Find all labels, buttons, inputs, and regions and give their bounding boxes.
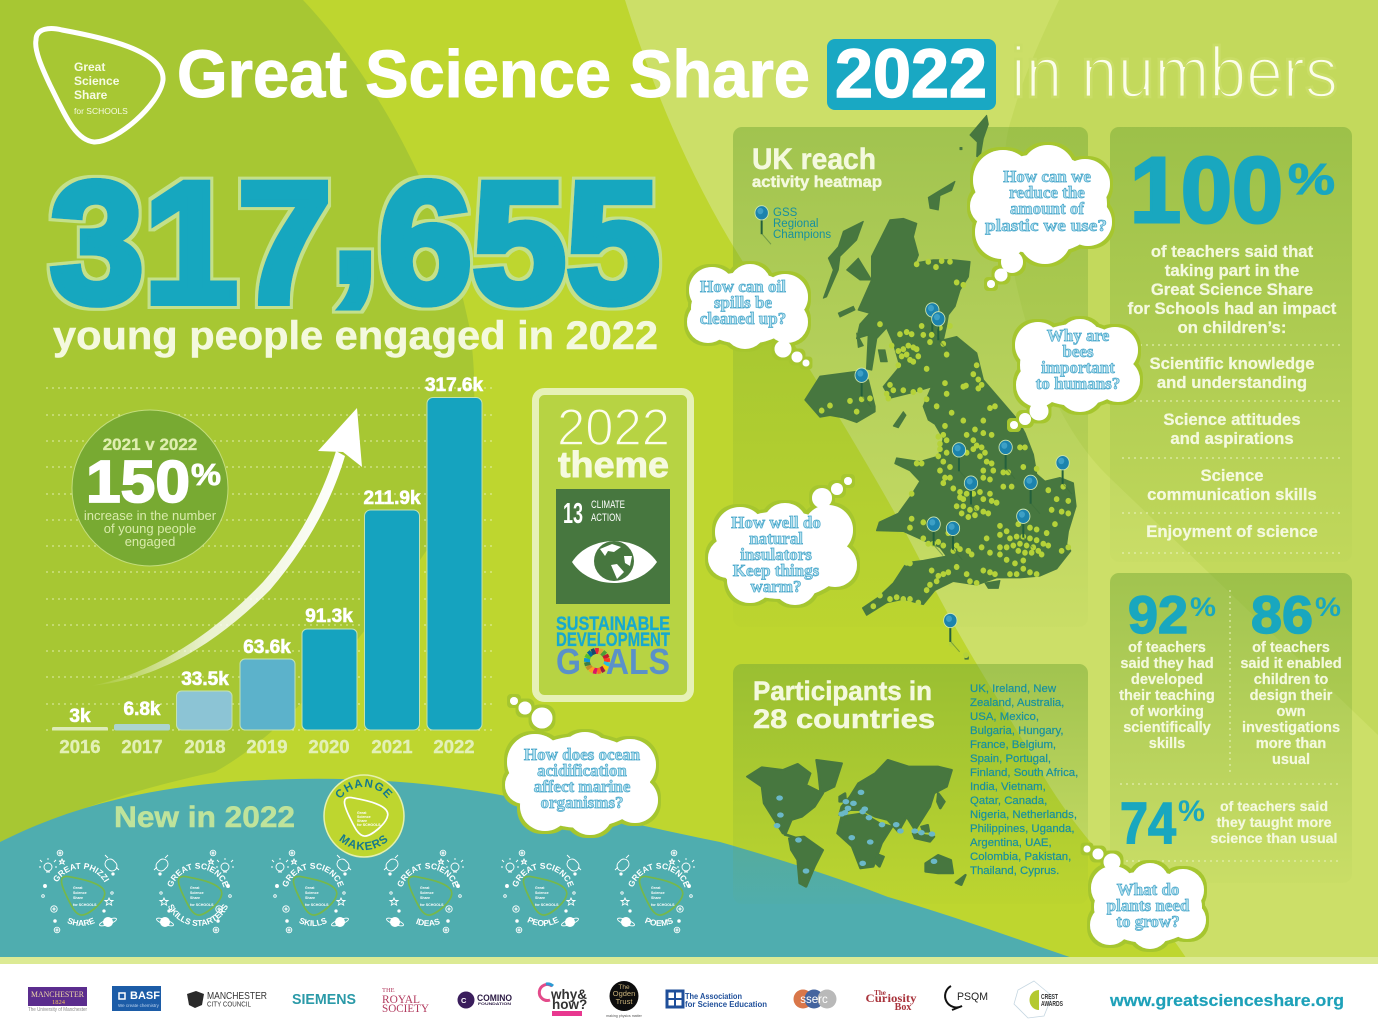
stat: 86%: said it enabled [1240,656,1342,672]
bar 2019 [240,637,295,757]
badge: Great Science Ideas [384,850,464,934]
heading: UK reach: activity heatmap [752,174,882,191]
panel: UK reach [733,115,1088,659]
text: countries list [970,683,1078,877]
stat: 86%: 86 [1251,586,1313,645]
title [177,34,1338,113]
logo: The Curiosity Box: The [874,989,886,997]
text: impact statement: Great Science Share [1151,280,1313,299]
text: website URL: www.greatscienceshare.org [1109,991,1344,1010]
callout: plastic question: How can we [1003,167,1091,186]
callout: insulators question [708,477,857,605]
stat: 92%: skills [1149,736,1185,752]
logo: Comino Foundation [458,992,512,1008]
bar chart: young people engaged per year [46,375,492,757]
teal wave [0,779,1090,964]
text: countries list: Argentina, UAE, [970,837,1052,849]
text: Sustainable Development Goals [556,613,670,682]
badge: Great Science Skills: GREAT SCIENCE [282,862,344,888]
callout: 150% increase: of young people [104,521,196,536]
callout: ocean acidification question: How does ocean [524,745,641,764]
Great Britain [857,219,1076,615]
stat: 92%: 92 [1128,586,1188,645]
badge: Great Science Skills Starters: Share [190,896,200,900]
stat: 74%: % [1178,795,1205,828]
icon: SDG colour wheel [584,648,610,674]
text: countries list: Finland, South Africa, [970,767,1078,779]
logo: Siemens: SIEMENS [292,992,356,1008]
bar 2017: 2017 [121,736,163,757]
heading: New in 2022: New in 2022 [114,801,295,834]
badge: Great Science Ideas: Share [420,896,430,900]
bar 2021: 2021 [371,736,413,757]
logo: Why and How: why& [550,987,587,1002]
stat: 92%: of teachers [1128,640,1206,656]
bar 2021: 211.9k [363,488,421,509]
logo: Royal Society: SOCIETY [382,1001,429,1015]
legend: GSS Regional Champions [755,206,831,244]
heading: UK reach [752,143,882,191]
badge: Change Makers: Great [357,811,367,815]
callout: ocean acidification question [505,697,658,835]
bar 2018 [176,669,232,757]
badge: Great Science Skills: for SCHOOLS [305,903,329,907]
callout: plastic question: amount of [1010,199,1084,218]
badge: Great Science Poems: Science [651,891,665,895]
logo: BASF: BASF [130,990,160,1002]
map: UK activity heatmap [805,115,1076,659]
text: impact statement: for Schools had an impact [1128,299,1337,318]
logo: PSQM: PSQM [957,991,988,1003]
logo: Why and How [539,984,587,1016]
logo: Manchester City Council: MANCHESTER [207,990,267,1002]
badge: Great Phizzi Share [39,850,120,934]
stat: 86%: of teachers [1252,640,1330,656]
logo: Why and How: how? [552,997,587,1012]
badge: Great Science Poems [614,850,695,934]
headline number: , [332,125,378,317]
bar 2016: 3k [69,706,91,727]
bar 2019: 63.6k [243,637,291,658]
badge: Great Science Ideas: GREAT SCIENCE [398,862,459,888]
stat: 74%: science than usual [1211,831,1337,847]
badge: Great Phizzi Share: GREAT PHIZZI [54,862,110,882]
callout: 150% increase: 150 [86,449,190,515]
text: countries list: Philippines, Uganda, [970,823,1074,835]
panel: 2022 theme [536,392,690,698]
title: Great Science Share [177,37,810,112]
callout: insulators question: How well do [731,513,821,532]
text: countries list: USA, Mexico, [970,711,1039,723]
bar 2017: 6.8k [124,699,161,720]
stat: 86%: more than [1256,736,1326,752]
logo: SSERC [794,990,836,1008]
stat: 92% [1119,586,1216,752]
stat: 74%: they taught more [1216,815,1332,831]
logo: Association for Science Education [667,991,767,1009]
badge: Great Science People [501,850,582,934]
badge: Great Science Skills Starters: Science [190,891,204,895]
bar 2018: 2018 [184,736,226,757]
bar 2016: 2016 [59,736,101,757]
stat: 86% [1240,586,1342,768]
list: impact areas: Enjoyment of science [1146,522,1318,541]
logo: Ogden Trust [606,981,643,1018]
bar 2017 [114,699,170,757]
badge: Great Science Skills: SKILLS [299,918,327,926]
badge: Change Makers: Science [357,815,371,819]
callout: insulators question: natural [749,529,803,548]
footer band [0,957,1378,1034]
text: impact statement: on children’s: [1178,318,1286,337]
logo: Association for Science Education: for Science Education [685,999,767,1009]
logo: Manchester City Council: CITY COUNCIL [207,1000,251,1008]
callout: bees question: important [1041,358,1115,377]
bar 2020 [302,606,357,757]
islands [823,115,1000,659]
list: impact areas: Science attitudes [1163,410,1301,429]
bar 2019: 2019 [246,736,288,757]
callout: 150% increase [72,410,228,566]
bar 2020: 2020 [308,736,350,757]
logo: Royal Society: THE [382,987,395,994]
logo: Royal Society: ROYAL [382,992,420,1006]
logo: Great Science Share for Schools: for SCHOOLS [74,106,128,116]
logo: Great Science Share for Schools: Share [74,88,108,102]
logo: University of Manchester: The University of Manchester [28,1007,87,1013]
logo: University of Manchester: 1824 [52,999,66,1006]
badge: Great Science Skills Starters [154,850,234,934]
badge: Great Science People: for SCHOOLS [535,903,559,907]
logo: Manchester City Council [187,990,267,1008]
text: countries list: Bulgaria, Hungary, [970,725,1064,737]
badge: Great Phizzi Share: Great [73,886,83,890]
callout: 150% increase: engaged [125,534,175,549]
badge: Great Science People: Science [535,891,549,895]
panel: teacher statistics [1110,573,1352,883]
badge: Great Science Ideas: IDEAS [416,918,440,926]
badge: Great Science Ideas: Great [420,886,430,890]
badge: Great Science People: Great [535,886,545,890]
badge: Great Phizzi Share: Science [73,891,87,895]
logo: SSERC: sserc [800,994,828,1006]
callout: 150% increase: increase in the number [84,508,217,523]
badge: Great Science Skills: Great [305,886,315,890]
panel: 100% of teachers [1110,127,1352,562]
footer: partner logos [28,981,1344,1018]
badge: Change Makers: CHANGE [336,778,393,798]
callout: plastic question [970,145,1112,288]
callout: bees question: bees [1062,342,1094,361]
logo: Association for Science Education: The Association [685,991,742,1001]
bar 2016 [52,706,108,757]
pins: regional champions [855,303,1072,652]
callout: insulators question: warm? [751,577,801,596]
text: countries list: UK, Ireland, New [970,683,1057,695]
panel: 2022 theme: theme [558,444,669,485]
stat: 86%: % [1315,592,1341,622]
callout: ocean acidification question: affect marine [534,777,631,796]
text: countries list: Nigeria, Netherlands, [970,809,1077,821]
Northern Ireland [805,372,875,422]
stat: 92%: their teaching [1119,688,1215,704]
badge: Great Science Ideas: Science [420,891,434,895]
text: countries list: Zealand, Australia, [970,697,1064,709]
badge: Great Phizzi Share: Share [73,896,83,900]
badge: Great Science Skills Starters: SKILLS STARTERS [168,904,228,926]
country dots [777,792,934,871]
headline subtitle: young people engaged in 2022 [53,314,658,358]
badge: Change Makers [323,774,405,858]
legend: GSS Regional Champions: Regional [773,218,818,230]
text: impact statement: of teachers said that [1151,242,1314,261]
stat: 86%: children to [1254,672,1328,688]
text: countries list: India, Vietnam, [970,781,1046,793]
icon: SDG 13 climate action [556,489,670,604]
logo: Ogden Trust: The [618,984,630,991]
arrow: growth curve [90,408,362,686]
activity dots [822,261,1068,655]
badge: Great Science Poems: POEMS [644,918,673,926]
badge: Great Science Skills Starters: Great [190,886,200,890]
text: impact statement [1128,242,1337,337]
icon: SDG 13 climate action: ACTION [591,512,621,524]
logo: Ogden Trust: Trust [616,997,633,1006]
badge: Great Science Skills [271,850,352,934]
list: impact areas [1146,354,1318,541]
heading: Participants in [753,676,932,706]
badge: Great Science People: PEOPLE [527,916,559,926]
logo: Great Science Share for Schools [36,29,163,142]
stat: 92%: said they had [1120,656,1214,672]
callout: oil spills question [687,264,810,366]
badge: Great Phizzi Share: SHARE [68,918,95,926]
badge: Change Makers: MAKERS [339,834,388,850]
callout: plants question: What do [1117,880,1179,899]
logo: Comino Foundation: COMINO [477,993,512,1004]
heading [753,676,935,734]
callout: insulators question: Keep things [733,561,820,580]
badge: Great Science People: GREAT SCIENCE [512,862,574,888]
callout: plants question [1084,846,1206,949]
stat: 100%: 100 [1130,138,1283,242]
logo: PSQM [945,986,988,1010]
callout: bees question [1010,319,1140,429]
logo: Crest Awards: AWARDS [1041,1001,1063,1008]
logo: Comino Foundation: C [461,996,467,1005]
badge: Great Science People: Share [535,896,545,900]
logo: Crest Awards: CREST [1041,994,1059,1001]
logo: University of Manchester [28,987,87,1013]
stat: 74%: 74 [1120,791,1176,856]
list: impact areas: Science [1200,466,1264,485]
stat: 74% [1120,791,1337,856]
callout: 150% increase: 2021 v 2022 [103,435,197,454]
callout: oil spills question: cleaned up? [700,309,786,328]
logo: Great Science Share for Schools: Great [74,60,105,74]
bar 2022 [425,375,483,757]
badge: Great Science Skills: Share [305,896,315,900]
list: impact areas: Scientific knowledge [1149,354,1315,373]
text: Sustainable Development Goals: GOALS [556,641,670,682]
title: 2022 [835,35,987,112]
legend: GSS Regional Champions: GSS [773,207,798,219]
bar 2022: 317.6k [425,375,483,396]
stat: 92%: % [1190,592,1216,622]
stat: 74%: of teachers said [1220,799,1328,815]
badge: Great Science Skills Starters: for SCHOOLS [190,903,214,907]
list: impact areas: communication skills [1147,485,1317,504]
stat: 100%: % [1288,155,1335,204]
logo: The Curiosity Box [866,989,916,1013]
panel: 2022 theme: 2022 [557,399,670,457]
logo: Royal Society [382,987,429,1015]
stat: 86%: design their [1250,688,1333,704]
logo: Crest Awards [1014,981,1063,1018]
callout: oil spills question: spills be [714,293,773,312]
text: Sustainable Development Goals: SUSTAINABLE [556,613,670,635]
stat: 86%: usual [1272,752,1310,768]
stat: 92%: developed [1131,672,1203,688]
logo: University of Manchester: MANCHESTER [31,989,84,999]
badge: Great Science Skills Starters: GREAT SCIENCE [168,862,229,888]
bar 2020: 91.3k [305,606,353,627]
text: countries list: Qatar, Canada, [970,795,1047,807]
stat: 86%: own [1276,704,1306,720]
badge: Change Makers: for SCHOOLS [357,823,381,827]
legend: GSS Regional Champions: Champions [773,229,831,241]
callout: bees question: to humans? [1036,374,1120,393]
logo: Great Science Share for Schools: Science [74,74,120,88]
badge: Great Science Poems: Share [651,896,661,900]
bar 2022: 2022 [433,736,475,757]
panel: Participants in 28 countries [733,664,1088,904]
headline number: 655 [378,147,660,339]
badge: Change Makers: Share [357,819,367,823]
callout: plastic question: reduce the [1009,183,1085,202]
callout: plastic question: plastic we use? [985,216,1107,235]
callout: insulators question: insulators [740,545,812,564]
map: world [747,760,965,887]
text: countries list: France, Belgium, [970,739,1056,751]
logo: Ogden Trust: Ogden [613,989,635,998]
text: countries list: Colombia, Pakistan, [970,851,1071,863]
icon: SDG 13 climate action: CLIMATE [591,499,625,511]
text: countries list: Thailand, Cyprus. [970,865,1059,877]
list: impact areas: and understanding [1157,373,1307,392]
callout: bees question: Why are [1047,326,1110,345]
text: Sustainable Development Goals: DEVELOPMENT [556,629,670,651]
badge: Great Science Ideas: for SCHOOLS [420,903,444,907]
bar 2018: 33.5k [181,669,229,690]
text: countries list: Spain, Portugal, [970,753,1051,765]
stat: 92%: scientifically [1123,720,1212,736]
badge: Great Science Poems: GREAT SCIENCE [628,862,690,888]
title: in numbers [1011,34,1338,113]
callout: 150% increase: % [191,457,221,492]
badge: Great Science Poems: Great [651,886,661,890]
callout: oil spills question: How can oil [700,277,786,296]
badge: Great Science Poems: for SCHOOLS [651,903,675,907]
headline number: 317 [50,147,337,339]
logo: BASF: We create chemistry [118,1003,160,1008]
list: impact areas: and aspirations [1170,429,1294,448]
logo: BASF [112,986,161,1011]
icon: SDG 13 climate action: 13 [563,498,583,530]
callout: ocean acidification question: organisms? [540,793,624,812]
badge: Great Science Skills: Science [305,891,319,895]
callout: plants question: to grow? [1116,912,1180,931]
callout: ocean acidification question: acidification [537,761,627,780]
text: impact statement: taking part in the [1165,261,1299,280]
badge: Great Phizzi Share: for SCHOOLS [73,903,97,907]
stat: 92%: of working [1130,704,1204,720]
heading: 28 countries [753,704,935,734]
stat: 86%: investigations [1242,720,1340,736]
logo: The Curiosity Box: Curiosity [866,991,916,1005]
logo: Ogden Trust: making physics matter [606,1014,643,1018]
logo: The Curiosity Box: Box [895,1002,911,1013]
bar 2021 [363,488,421,757]
callout: plants question: plants need [1107,896,1190,915]
logo: Comino Foundation: FOUNDATION [478,1002,512,1006]
heading: UK reach: UK reach [752,143,876,176]
